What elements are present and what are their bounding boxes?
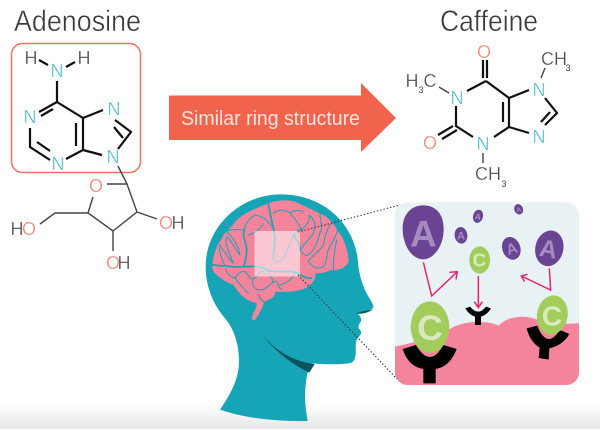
- molecule: large caffeine left: C: [417, 309, 443, 348]
- jaw shadow: [258, 330, 315, 373]
- molecule: caffeine middle: [469, 246, 490, 274]
- atom labels: N: [106, 147, 120, 167]
- adenosine molecule: [10, 48, 184, 273]
- receptor: middle free: [465, 307, 491, 325]
- molecule: large caffeine right: C: [542, 300, 562, 331]
- molecule: adenosine small centre-left: [454, 226, 468, 244]
- panel: receptor close-up: [395, 202, 579, 385]
- receptor: right occupied: [527, 326, 569, 360]
- molecule: adenosine right: A: [537, 235, 560, 265]
- atom labels: N: [52, 154, 64, 174]
- molecule: adenosine small top right: A: [516, 206, 523, 215]
- atom labels: O: [423, 133, 437, 153]
- brain folds: [220, 210, 337, 302]
- arrow: adenosine repelled left: [423, 262, 457, 296]
- molecule: adenosine small top right: [512, 203, 525, 216]
- atom labels: H: [24, 48, 38, 68]
- atom labels: 3: [418, 85, 424, 95]
- arrow: similar ring structure: Similar ring structure: [181, 108, 360, 130]
- atom labels: H: [406, 71, 418, 91]
- atom labels: O: [89, 176, 103, 196]
- arrow: caffeine to receptor: [474, 276, 482, 308]
- nostril: [356, 309, 373, 314]
- caffeine molecule: [406, 42, 571, 189]
- methyl bonds: [439, 68, 545, 163]
- caffeine ring bonds: [438, 60, 557, 139]
- atom labels: N: [532, 127, 546, 147]
- atom labels: N: [450, 88, 464, 108]
- head silhouette: [206, 194, 373, 421]
- atom labels: C: [424, 71, 436, 91]
- title: Caffeine: Caffeine: [440, 5, 538, 38]
- brain main fissures: [212, 203, 312, 278]
- highlight square on brain: [254, 231, 300, 276]
- molecule: large adenosine left: [403, 205, 444, 259]
- atom labels: H: [172, 213, 184, 233]
- molecule: caffeine middle: C: [473, 249, 486, 270]
- atom labels: O: [22, 219, 36, 239]
- molecule: adenosine medium: A: [504, 240, 520, 259]
- atom labels: O: [477, 42, 491, 62]
- receptor: left occupied: [403, 345, 457, 383]
- atom labels: H: [118, 253, 130, 273]
- title: Adenosine: Adenosine: [14, 5, 141, 38]
- ribose bonds: [40, 166, 157, 251]
- molecule: large caffeine right: [534, 293, 571, 337]
- molecule: large caffeine left: [411, 301, 449, 353]
- atom labels: H: [10, 219, 24, 239]
- molecule: adenosine medium: [499, 234, 524, 262]
- atom labels: N: [50, 61, 64, 81]
- atom labels: H: [78, 48, 90, 68]
- atom labels: N: [476, 134, 490, 154]
- molecule: adenosine right: [532, 228, 567, 269]
- arrow: similar ring structure: [169, 83, 396, 152]
- pink tissue: [395, 317, 579, 385]
- arrow: adenosine repelled right: [521, 268, 551, 290]
- brain: [212, 200, 349, 320]
- atom labels: [406, 42, 571, 189]
- atom labels: N: [108, 99, 120, 119]
- panel: highlighted adenine ring box: [12, 44, 140, 172]
- atom labels: [10, 48, 184, 273]
- atom labels: N: [532, 80, 546, 100]
- atom labels: CH: [541, 49, 567, 69]
- atom labels: N: [24, 107, 36, 127]
- molecule: large adenosine left: A: [410, 214, 437, 255]
- atom labels: 3: [565, 63, 571, 73]
- atom labels: CH: [475, 164, 501, 184]
- dotted zoom lines: [298, 205, 400, 379]
- adenine ring bonds: [30, 60, 131, 160]
- molecule: adenosine small top: [471, 209, 485, 224]
- atom labels: O: [159, 213, 173, 233]
- atom labels: 3: [501, 179, 507, 189]
- molecule: adenosine small centre-left: A: [457, 231, 465, 243]
- atom labels: O: [106, 253, 120, 273]
- molecule: adenosine small top: A: [474, 211, 483, 222]
